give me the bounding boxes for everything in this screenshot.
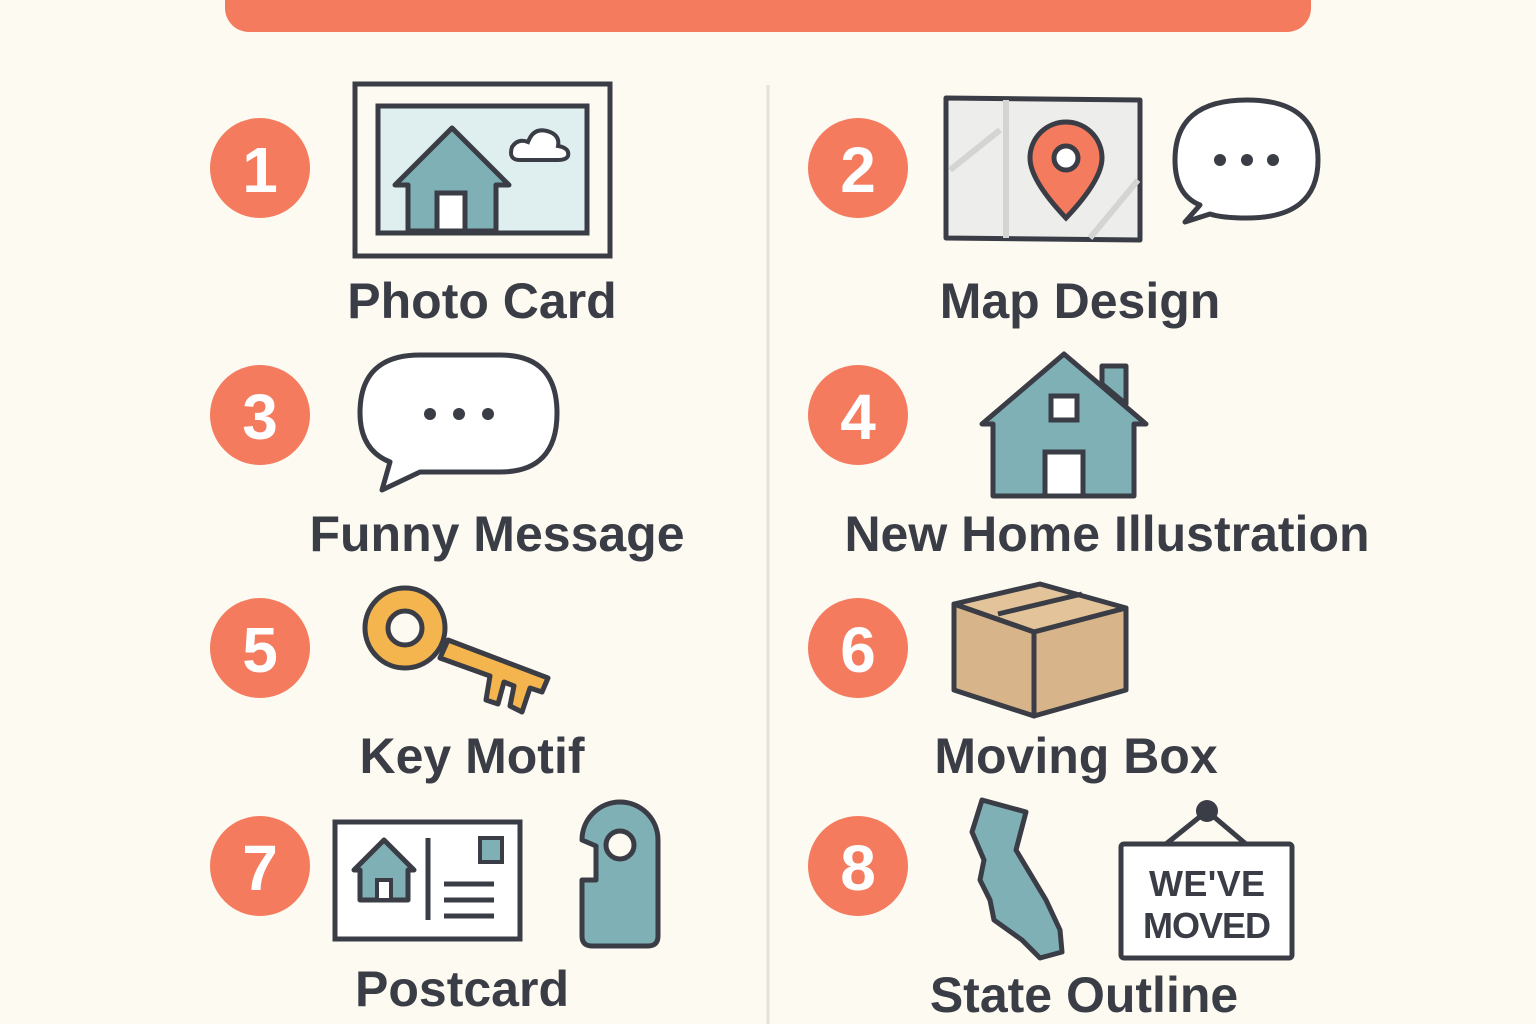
- item 8: state outline: MOVED: [1143, 905, 1271, 946]
- item 3: funny message: 3: [242, 381, 278, 453]
- item 7: postcard: 7: [242, 832, 278, 904]
- title banner: [225, 0, 1311, 32]
- item 2: map design: Map Design: [940, 273, 1220, 329]
- item 6: moving box: [808, 584, 1218, 784]
- item 1: photo card: Photo Card: [347, 273, 617, 329]
- item 5: key motif: 5: [242, 614, 278, 686]
- item 4: new home illustration: [808, 354, 1370, 562]
- item 8: state outline: 8: [840, 832, 876, 904]
- item 5: key motif: Key Motif: [360, 728, 585, 784]
- item 8: state outline: State Outline: [930, 967, 1238, 1023]
- item 7: postcard: [210, 802, 658, 1017]
- item 2: map design: [808, 98, 1318, 329]
- item 3: funny message: [210, 355, 685, 562]
- item 2: map design: 2: [840, 134, 876, 206]
- item 5: key motif: [210, 588, 585, 784]
- item 8: state outline: WE'VE: [1149, 863, 1265, 904]
- item 6: moving box: Moving Box: [934, 728, 1218, 784]
- item 6: moving box: 6: [840, 614, 876, 686]
- item 4: new home illustration: 4: [840, 381, 876, 453]
- item 1: photo card: 1: [242, 134, 278, 206]
- item 8: state outline: [808, 800, 1292, 1023]
- item 1: photo card: [210, 84, 617, 329]
- item 7: postcard: Postcard: [355, 961, 569, 1017]
- item 3: funny message: Funny Message: [309, 506, 685, 562]
- item 4: new home illustration: New Home Illustration: [844, 506, 1370, 562]
